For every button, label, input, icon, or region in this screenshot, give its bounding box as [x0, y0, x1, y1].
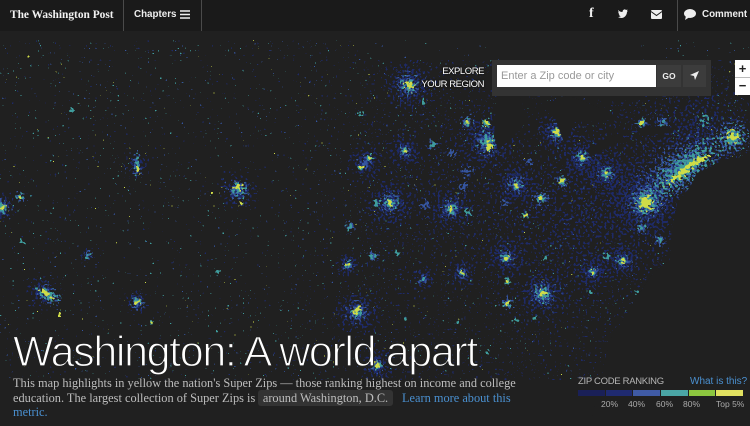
- search input: Enter a Zip code or city: [501, 70, 614, 82]
- icon: hamburger: [180, 10, 190, 19]
- icon: location arrow: [690, 71, 699, 80]
- scale labels: Top 5%: [716, 399, 744, 409]
- divider: [123, 0, 124, 31]
- link continued: metric.: [13, 405, 48, 419]
- line 2: education. The largest collection of Super Zips is: [13, 391, 255, 405]
- legend title: ZIP CODE RANKING: [578, 376, 664, 387]
- title: Washington: A world apart: [13, 328, 477, 376]
- map mask: Atlantic Ocean: [590, 151, 750, 426]
- icon: facebook: f: [589, 6, 594, 21]
- comment label: Comment: [702, 9, 747, 20]
- zoom control: +: [739, 61, 746, 76]
- search panel: [492, 60, 711, 96]
- scale labels: 20%: [601, 399, 618, 409]
- link: Learn more about this: [402, 391, 511, 405]
- map mask: Great Lakes: [494, 40, 668, 156]
- map layer: blue mid-ranking dots: [0, 40, 750, 380]
- legend: [578, 376, 747, 409]
- explore label: YOUR REGION: [421, 79, 484, 90]
- icon: envelope: [651, 10, 662, 19]
- go button: GO: [662, 71, 676, 81]
- body text: [13, 376, 516, 419]
- map layer: teal high-ranking dots: [0, 40, 750, 380]
- locate button: [683, 65, 706, 87]
- go button: [657, 65, 681, 87]
- explore label: EXPLORE: [442, 66, 484, 77]
- zoom control: −: [739, 78, 746, 93]
- colour scale: [578, 390, 743, 396]
- search input: [497, 65, 656, 87]
- scale labels: 40%: [628, 399, 645, 409]
- icon: twitter: [618, 9, 628, 18]
- map layer: yellow Super Zip dots: [0, 40, 750, 380]
- scale labels: 80%: [683, 399, 700, 409]
- divider: [735, 77, 750, 78]
- zoom control: [735, 60, 750, 95]
- chapters menu: Chapters: [134, 9, 176, 20]
- explore label: [421, 66, 484, 90]
- logo: The Washington Post: [10, 9, 114, 21]
- icon: comment bubble: [684, 9, 696, 20]
- legend link: What is this?: [690, 376, 747, 387]
- scale labels: [601, 399, 744, 409]
- header bar: [0, 0, 750, 31]
- scale labels: 60%: [656, 399, 673, 409]
- highlight pill: around Washington, D.C.: [263, 390, 388, 404]
- line 1: This map highlights in yellow the nation's Super Zips — those ranking highest on income and college: [13, 376, 516, 390]
